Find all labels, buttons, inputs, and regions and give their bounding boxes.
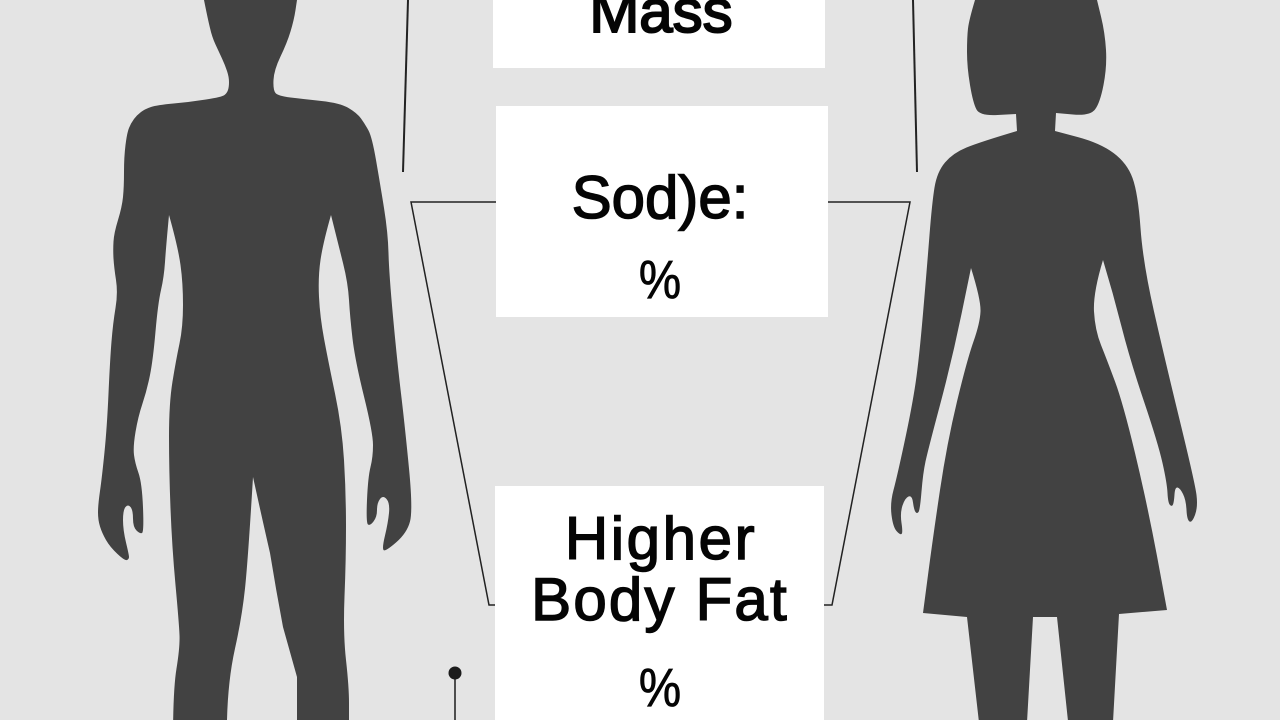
label box: Higher Body Fat %: %	[639, 657, 681, 718]
label box: Sodje %: Sod)e:	[572, 164, 748, 231]
pin marker	[448, 666, 462, 720]
label box: Sodje %	[496, 106, 828, 317]
label box: Higher Body Fat %: Body Fat	[531, 566, 789, 633]
label box: Mass	[493, 0, 825, 68]
label box: Higher Body Fat %	[495, 486, 824, 720]
female silhouette	[891, 0, 1197, 720]
label box: Higher Body Fat %: Higher	[565, 505, 757, 572]
male silhouette	[98, 0, 411, 720]
connector lines	[403, 0, 917, 605]
label box: Sodje %: %	[639, 249, 681, 310]
